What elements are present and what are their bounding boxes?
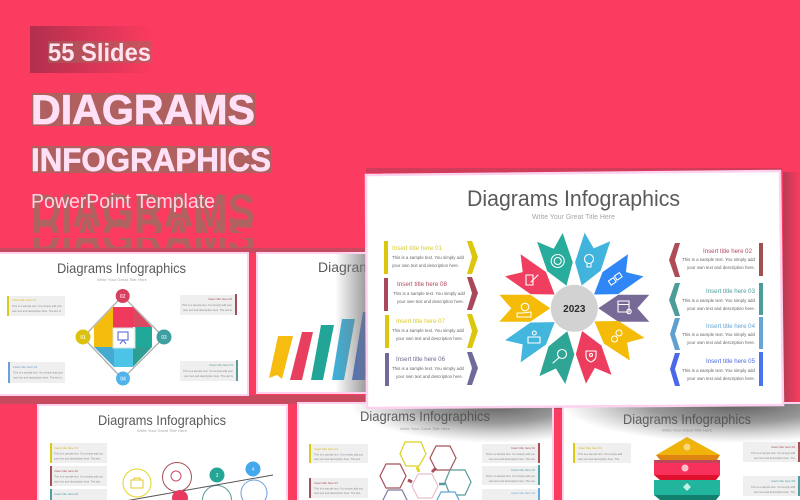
text box 02: Insert title here 02 xyxy=(54,469,78,473)
step 3 xyxy=(210,468,224,482)
text box 03: own text and description here. The text is xyxy=(184,374,234,378)
item 01: This is a sample text. You simply add xyxy=(392,255,464,260)
slide: stacked pyramid xyxy=(563,403,800,500)
icon: document pen xyxy=(526,275,538,285)
item 08: your own text and description here. xyxy=(397,299,464,304)
item 03: your own text and description here. xyxy=(687,306,755,311)
item 05: This is a sample text. You simply add xyxy=(682,368,755,373)
hexagon diagram xyxy=(380,442,471,500)
slide title: Diagrams xyxy=(318,259,378,275)
badge 01: 01 xyxy=(80,335,86,341)
text box right 1: Insert title here 02 xyxy=(511,446,535,450)
slide title: Diagrams Infographics xyxy=(98,412,226,428)
slide subtitle: Write Your Great Title Here xyxy=(662,428,712,432)
text box left 2: own text and description here. The text xyxy=(314,491,361,495)
text box left: own text and description here. The xyxy=(578,457,620,461)
ghost reflection text: DIAGRAMS xyxy=(31,184,255,237)
text box left 2 xyxy=(309,478,368,498)
badge 02: 02 xyxy=(120,294,126,300)
slide: ribbon bar chart xyxy=(257,253,378,393)
item 06: your own text and description here. xyxy=(396,374,463,379)
slide: circles on line xyxy=(38,405,287,500)
item 06 xyxy=(385,352,478,386)
text box 02: own text and description here. The text is xyxy=(183,308,233,312)
icon: calendar xyxy=(618,301,631,314)
item 07: Insert title here 07 xyxy=(396,319,446,325)
item 08: Insert title here 08 xyxy=(397,282,448,288)
center circle 2023: 2023 xyxy=(563,304,586,315)
text box 04: Insert title here 04 xyxy=(13,365,37,369)
text box left: Insert title here 01 xyxy=(578,446,602,450)
item 05 xyxy=(670,352,763,386)
text box 02 xyxy=(50,466,107,486)
icon: search person xyxy=(553,350,566,363)
text box right 1: This is a sample text. You simply add you xyxy=(486,452,535,456)
center circle 2023 xyxy=(551,285,598,332)
text box left: This is a sample text. You simply add xyxy=(578,452,623,456)
text box left xyxy=(573,443,631,463)
text box 02: This is a sample text. You simply add you xyxy=(54,474,104,478)
slide subtitle: Write Your Great Title Here xyxy=(97,278,147,282)
item 02: Insert title here 02 xyxy=(703,249,753,255)
circles diagram xyxy=(123,462,273,500)
title: Diagrams: DIAGRAMS xyxy=(31,86,255,133)
text box left 1: Insert title here 01 xyxy=(314,447,338,451)
step 4 xyxy=(246,462,260,476)
stacked pyramid xyxy=(654,437,720,500)
item 03 xyxy=(669,283,763,316)
slide title: Diagrams Infographics xyxy=(623,411,751,427)
slide subtitle: Write Your Great Title Here xyxy=(137,429,187,433)
heading group xyxy=(30,26,271,262)
text box 01: own text and description here. The text is xyxy=(12,309,62,313)
text box left 2: Insert title here 07 xyxy=(314,481,338,485)
slide: diamond diagram xyxy=(0,253,248,395)
title: Infographics: INFOGRAPHICS xyxy=(31,142,271,178)
item 05: Insert title here 05 xyxy=(706,359,756,365)
diamond diagram xyxy=(76,289,172,386)
text box right 2: This is a sample text. You simply add you xyxy=(486,474,535,478)
text box 02: This is a sample text. You simply add your xyxy=(182,303,232,307)
text box right 2 xyxy=(743,476,800,496)
text box right 1: own text and description here. The text xyxy=(489,457,535,461)
text box right 1 xyxy=(482,443,540,463)
text box 01 xyxy=(50,443,107,463)
item 04: Insert title here 04 xyxy=(706,324,756,330)
text box right 2 xyxy=(482,465,540,485)
text box 04 xyxy=(8,362,65,383)
arrow wheel xyxy=(499,233,649,384)
ribbon bars xyxy=(269,312,374,380)
text box left 1: own text and description here. The text xyxy=(314,457,361,461)
main title: Diagrams Infographics xyxy=(467,186,680,211)
item 07: your own text and description here. xyxy=(396,336,463,341)
icon: coin hand xyxy=(517,303,531,317)
text box right 3: Insert title here 04 xyxy=(511,491,535,495)
item 03: Insert title here 03 xyxy=(706,289,756,295)
subtitle: PowerPoint Template: PowerPoint Template xyxy=(31,191,215,213)
slide title: Diagrams Infographics xyxy=(57,260,186,276)
text box 01: This is a sample text. You simply add you xyxy=(54,452,104,456)
icon: target clock xyxy=(551,254,564,268)
icon: shield xyxy=(586,351,596,362)
text box 03: Insert title here 03 xyxy=(54,492,78,496)
icon: stamp xyxy=(528,331,540,343)
slide: hexagon cycle xyxy=(298,403,553,500)
text box right 1 xyxy=(743,442,800,462)
badge 03: 03 xyxy=(161,335,167,341)
item 05: your own text and description here. xyxy=(687,376,755,381)
text box 01 xyxy=(7,296,65,316)
text box 01: Insert title here 01 xyxy=(12,298,36,302)
icon: satellite xyxy=(608,273,622,285)
item 01 xyxy=(384,241,478,274)
item 07 xyxy=(385,314,478,348)
item 07: This is a sample text. You simply add xyxy=(392,328,464,333)
item 08: This is a sample text. You simply add xyxy=(393,291,465,296)
badge 04: 04 xyxy=(120,376,126,382)
text box 02 xyxy=(180,294,237,315)
center icon xyxy=(118,332,128,344)
badge: 55 slides: 55 Slides xyxy=(48,39,151,67)
item 02: This is a sample text. You simply add xyxy=(682,257,755,262)
text box right 2: own text and description here. The xyxy=(754,490,796,494)
text box 03 xyxy=(180,360,238,381)
text box right 2: Insert title here 03 xyxy=(771,479,795,483)
main slide xyxy=(366,171,783,408)
text box 03: This is a sample text. You simply add your xyxy=(183,369,233,373)
text box 03 xyxy=(50,489,107,500)
text box right 2: own text and description here. The text xyxy=(489,479,535,483)
text box right 2: This is a sample text. You simply add xyxy=(751,485,795,489)
text box 03: Insert title here 03 xyxy=(209,363,233,367)
item 01: your own text and description here. xyxy=(392,263,459,268)
arrows xyxy=(499,233,649,384)
text box left 1: This is a sample text. You simply add you xyxy=(314,452,364,456)
item 03: This is a sample text. You simply add xyxy=(682,298,755,303)
item 08 xyxy=(384,277,478,311)
item 04 xyxy=(670,317,763,350)
badge: 55 slides xyxy=(30,26,152,73)
text box 02: Insert title here 02 xyxy=(208,297,232,301)
step 4: 4 xyxy=(252,467,255,473)
icon: bulb xyxy=(584,254,594,267)
slide title: Diagrams Infographics xyxy=(360,408,490,424)
text box left 2: This is a sample text. You simply add you xyxy=(314,486,364,490)
text box right 1: Insert title here 02 xyxy=(771,445,795,449)
text box 01: This is a sample text. You simply add your xyxy=(12,304,62,308)
item 02: your own text and description here. xyxy=(687,265,755,270)
text box right 2: Insert title here 03 xyxy=(511,468,535,472)
text box right 1: This is a sample text. You simply add xyxy=(751,451,795,455)
item 04: your own text and description here. xyxy=(687,340,755,345)
item 04: This is a sample text. You simply add xyxy=(682,332,755,337)
text box 01: own text and description here. The text xyxy=(54,456,101,460)
text box 02: own text and description here. The text xyxy=(54,480,101,484)
item 06: This is a sample text. You simply add xyxy=(392,366,464,371)
icon: chain xyxy=(612,330,622,342)
item 01: Insert title here 01 xyxy=(392,246,443,252)
ghost reflection text: DIAGRAMS xyxy=(31,209,255,262)
text box left 1 xyxy=(309,444,368,463)
text box 01: Insert title here 01 xyxy=(54,446,78,450)
text box right 1: own text and description here. The xyxy=(754,456,796,460)
item 06: Insert title here 06 xyxy=(396,357,446,363)
text box 04: This is a sample text. You simply add your xyxy=(13,370,63,374)
item 02 xyxy=(669,243,763,277)
step 3: 3 xyxy=(216,473,219,479)
slide subtitle: Write Your Great Title Here xyxy=(400,427,450,431)
ghost reflection text xyxy=(34,194,254,248)
text box right 3 xyxy=(482,488,540,500)
main subtitle: Write Your Great Title Here xyxy=(532,214,615,221)
text box 04: own text and description here. The text is xyxy=(13,376,63,380)
